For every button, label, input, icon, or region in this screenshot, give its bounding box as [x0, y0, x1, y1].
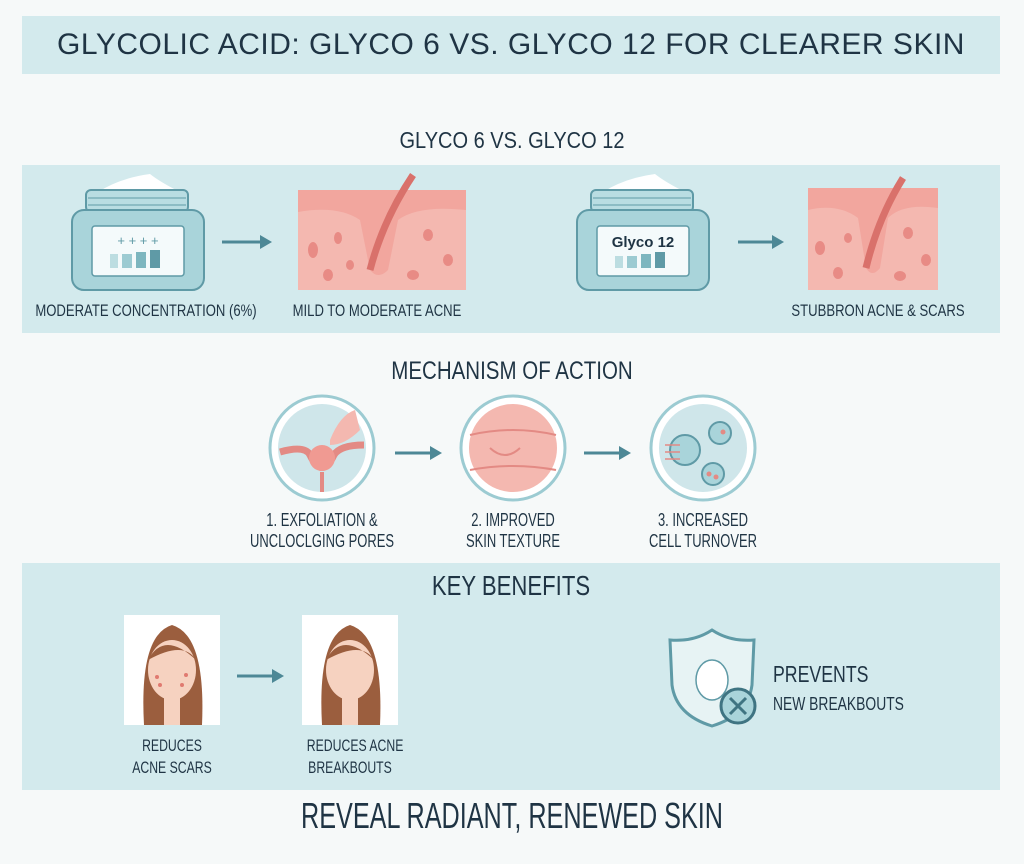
label: prevents: PREVENTS	[773, 661, 868, 687]
icon: pore	[270, 396, 374, 500]
arrow 1	[222, 235, 272, 249]
label: stubborn acne: STUBBRON ACNE & SCARS	[791, 301, 965, 320]
icon: texture	[461, 396, 565, 500]
label: step 1: 1. EXFOLIATION &	[266, 510, 378, 530]
mechanism diagram	[268, 394, 756, 502]
label: reduces breakouts	[307, 736, 403, 777]
icon: jar glyco 6	[72, 174, 204, 290]
icon: jar glyco 12: Glyco 12	[612, 234, 674, 251]
panel: key benefits	[22, 563, 1000, 790]
title bar	[22, 16, 1000, 74]
heading: key benefits: KEY BENEFITS	[432, 570, 590, 601]
heading: mechanism: MECHANISM OF ACTION	[391, 357, 633, 385]
label: step 3: 3. INCREASED	[658, 510, 748, 530]
panel: comparison	[22, 165, 1000, 333]
arrow m1	[395, 446, 442, 460]
label: step 2	[466, 510, 560, 551]
arrow m2	[584, 446, 631, 460]
label: prevents: NEW BREAKBOUTS	[773, 694, 904, 714]
heading: comparison: GLYCO 6 VS. GLYCO 12	[399, 127, 625, 153]
label: moderate concentration: MODERATE CONCENTRATION (6%)	[35, 301, 257, 320]
label: step 2: 2. IMPROVED	[471, 510, 555, 530]
label: mild acne: MILD TO MODERATE ACNE	[293, 301, 461, 320]
icon: face with acne	[124, 615, 220, 725]
icon: skin cross-section 1	[298, 175, 466, 290]
label: prevents	[773, 661, 904, 714]
footer tagline: REVEAL RADIANT, RENEWED SKIN	[301, 795, 723, 836]
label: reduces scars: ACNE SCARS	[132, 758, 212, 777]
label: step 3: CELL TURNOVER	[649, 531, 757, 551]
icon: jar glyco 6: + + + +	[117, 233, 159, 248]
label: reduces breakouts: REDUCES ACNE	[307, 736, 403, 755]
label: step 3	[649, 510, 757, 551]
label: step 1: UNCLOCLGING PORES	[250, 531, 394, 551]
arrow benefits	[237, 669, 284, 683]
title bar: GLYCOLIC ACID: GLYCO 6 VS. GLYCO 12 FOR CLEARER SKIN	[57, 28, 965, 61]
icon: clear face	[302, 615, 398, 725]
label: step 2: SKIN TEXTURE	[466, 531, 560, 551]
label: reduces scars	[132, 736, 212, 777]
icon: cells	[651, 396, 755, 500]
icon: jar glyco 12	[577, 174, 709, 290]
icon: skin cross-section 2	[808, 178, 938, 290]
label: reduces scars: REDUCES	[142, 736, 202, 755]
icon: shield	[670, 630, 755, 726]
label: reduces breakouts: BREAKBOUTS	[308, 758, 392, 777]
arrow 2	[738, 235, 784, 249]
label: step 1	[250, 510, 394, 551]
